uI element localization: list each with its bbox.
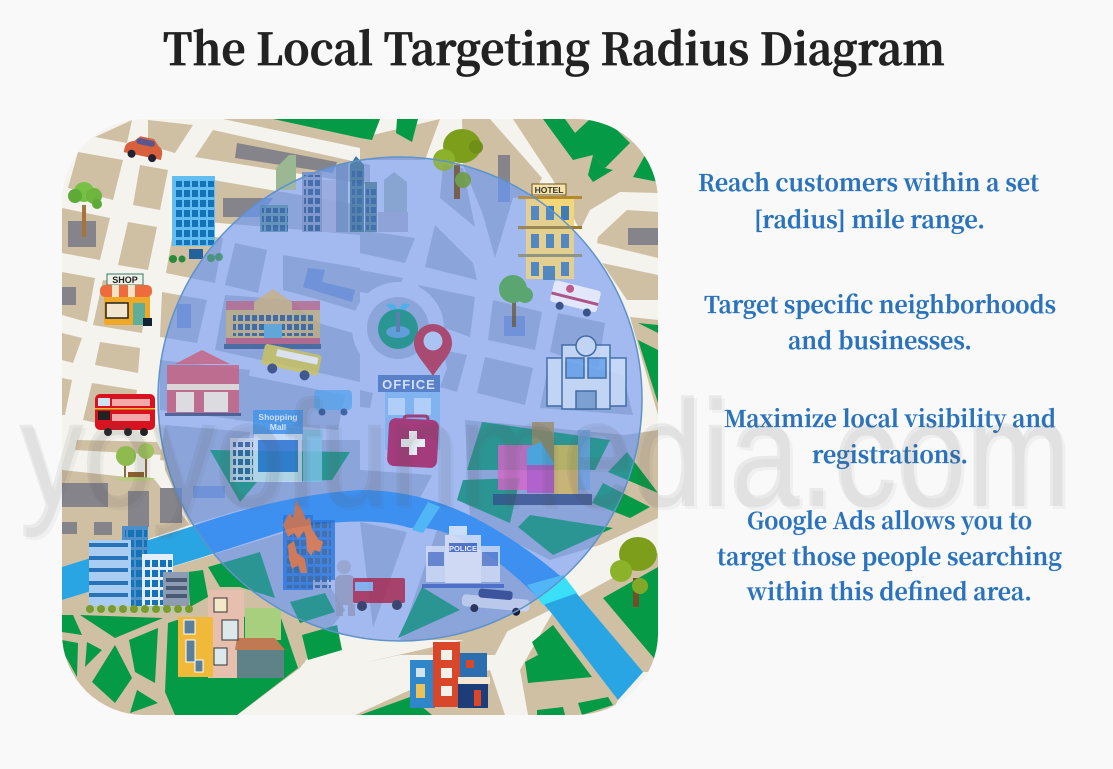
text block 1	[698, 165, 1039, 235]
text block 2: and businesses.	[788, 323, 972, 356]
icon: small tree	[499, 275, 533, 327]
text block 4: Google Ads allows you to	[747, 503, 1032, 536]
icon: fire truck	[353, 578, 405, 611]
icon: school	[224, 289, 321, 349]
text block 4: target those people searching	[717, 539, 1062, 572]
bridge over river	[538, 577, 577, 605]
icon: shopping mall: Mall	[270, 422, 286, 432]
icon: van	[314, 390, 352, 416]
icon: medical kit	[387, 416, 439, 468]
map	[62, 119, 658, 715]
text block 4	[717, 503, 1062, 607]
city blocks	[62, 119, 658, 715]
icon: police station: POLICE	[449, 544, 477, 553]
river	[62, 526, 643, 700]
text block 3	[724, 401, 1056, 470]
icon: hospital	[547, 336, 626, 409]
radius circle	[158, 158, 642, 640]
icon: shopping mall: Shopping	[258, 412, 298, 422]
text block 3: Maximize local visibility and	[724, 401, 1056, 434]
text block 2	[704, 287, 1056, 356]
icon: car	[124, 136, 162, 162]
icon: shop	[100, 274, 152, 326]
text block 1: Reach customers within a set	[698, 165, 1039, 198]
text block 2: Target specific neighborhoods	[704, 287, 1056, 320]
icon: shopping mall	[230, 410, 322, 482]
icon: right tree	[610, 537, 657, 607]
icon: police car	[461, 587, 531, 617]
icon: skyline	[260, 155, 408, 232]
icon: ambulance	[550, 280, 601, 316]
text block 3: registrations.	[812, 437, 968, 470]
icon: hotel: HOTEL	[535, 185, 563, 195]
icon: police station	[422, 526, 504, 588]
icon: tree with plot	[68, 182, 102, 237]
fountain	[352, 282, 444, 359]
icon: office building: OFFICE	[382, 377, 436, 392]
icon: blue office tower	[169, 176, 223, 263]
icon: park bench and trees	[115, 443, 155, 481]
text block 4: within this defined area.	[746, 574, 1032, 607]
text block 1: [radius] mile range.	[754, 202, 985, 235]
icon: bottom terrace houses	[410, 642, 490, 708]
icon: school bus	[262, 344, 322, 380]
icon: office building	[378, 375, 440, 450]
icon: red bus	[95, 394, 155, 436]
icon: location pin	[414, 324, 452, 376]
parks	[62, 119, 658, 715]
icon: fire station	[165, 350, 241, 416]
icon: burning building	[283, 500, 335, 590]
icon: firefighter	[335, 560, 355, 616]
title: The Local Targeting Radius Diagram	[163, 14, 945, 78]
icon: lower-left towers	[85, 526, 193, 613]
icon: colourful houses	[493, 422, 592, 505]
building footprints	[62, 143, 658, 535]
icon: shop: SHOP	[112, 275, 138, 285]
icon: olive tree	[433, 129, 483, 199]
icon: yellow townhouses	[178, 590, 285, 678]
icon: hotel	[518, 184, 582, 280]
